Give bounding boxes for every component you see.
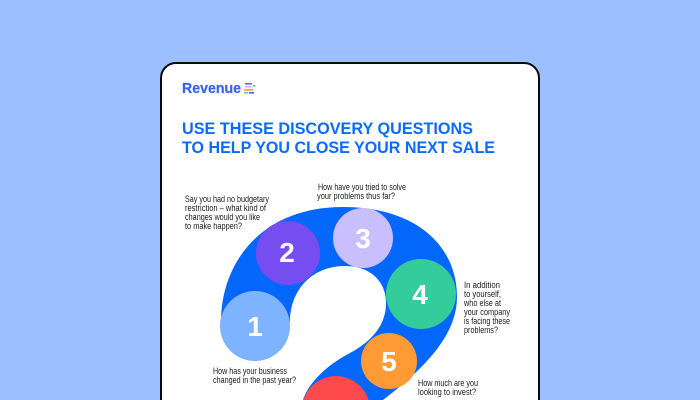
question 4 text: is facing these: [464, 316, 510, 326]
question 1 text: How has your business: [213, 366, 287, 376]
question mark shape: [221, 207, 457, 400]
question 1 text: changed in the past year?: [213, 375, 296, 385]
number 1: 1: [247, 311, 263, 342]
logo wordmark: Revenue: [182, 81, 241, 97]
question 2 text: restriction – what kind of: [185, 203, 266, 213]
number 2: 2: [279, 237, 295, 268]
circle 2: [256, 221, 320, 285]
logo icon: coloured bars: [244, 83, 256, 94]
question 2 text: [185, 194, 269, 231]
logo: Revenue: [182, 81, 256, 97]
circle 1: [220, 291, 290, 361]
title: USE THESE DISCOVERY QUESTIONS: [182, 119, 473, 138]
question 4 text: your company: [464, 307, 510, 317]
question 5 text: How much are you: [418, 378, 478, 388]
question 5 text: looking to invest?: [418, 387, 476, 397]
question 2 text: changes would you like: [185, 212, 260, 222]
title: TO HELP YOU CLOSE YOUR NEXT SALE: [182, 138, 495, 157]
circle 3: [333, 208, 393, 268]
circle 4: [386, 259, 456, 329]
number 3: 3: [355, 223, 371, 254]
question 2 text: to make happen?: [185, 221, 242, 231]
question 5 text: [418, 378, 478, 397]
question 4 text: to yourself,: [464, 289, 501, 299]
question 3 text: [317, 182, 406, 201]
question 4 text: In addition: [464, 280, 500, 290]
circle 5: [361, 333, 417, 389]
question 3 text: your problems thus far?: [317, 191, 395, 201]
panel: white card: [161, 63, 539, 400]
question 1 text: [213, 366, 296, 385]
title: [182, 119, 495, 157]
number 4: 4: [412, 279, 428, 310]
step 1: [220, 291, 290, 361]
number 5: 5: [381, 346, 397, 377]
step 6: red circle cropped by the frame: [304, 376, 368, 400]
question 3 text: How have you tried to solve: [318, 182, 406, 192]
question 4 text: problems?: [464, 325, 498, 335]
step 3: [333, 208, 393, 268]
question 4 text: [463, 280, 510, 335]
question 4 text: who else at: [463, 298, 501, 308]
question 2 text: Say you had no budgetary: [185, 194, 269, 204]
step 2: [256, 221, 320, 285]
step 5: [361, 333, 417, 389]
step 4: [386, 259, 456, 329]
